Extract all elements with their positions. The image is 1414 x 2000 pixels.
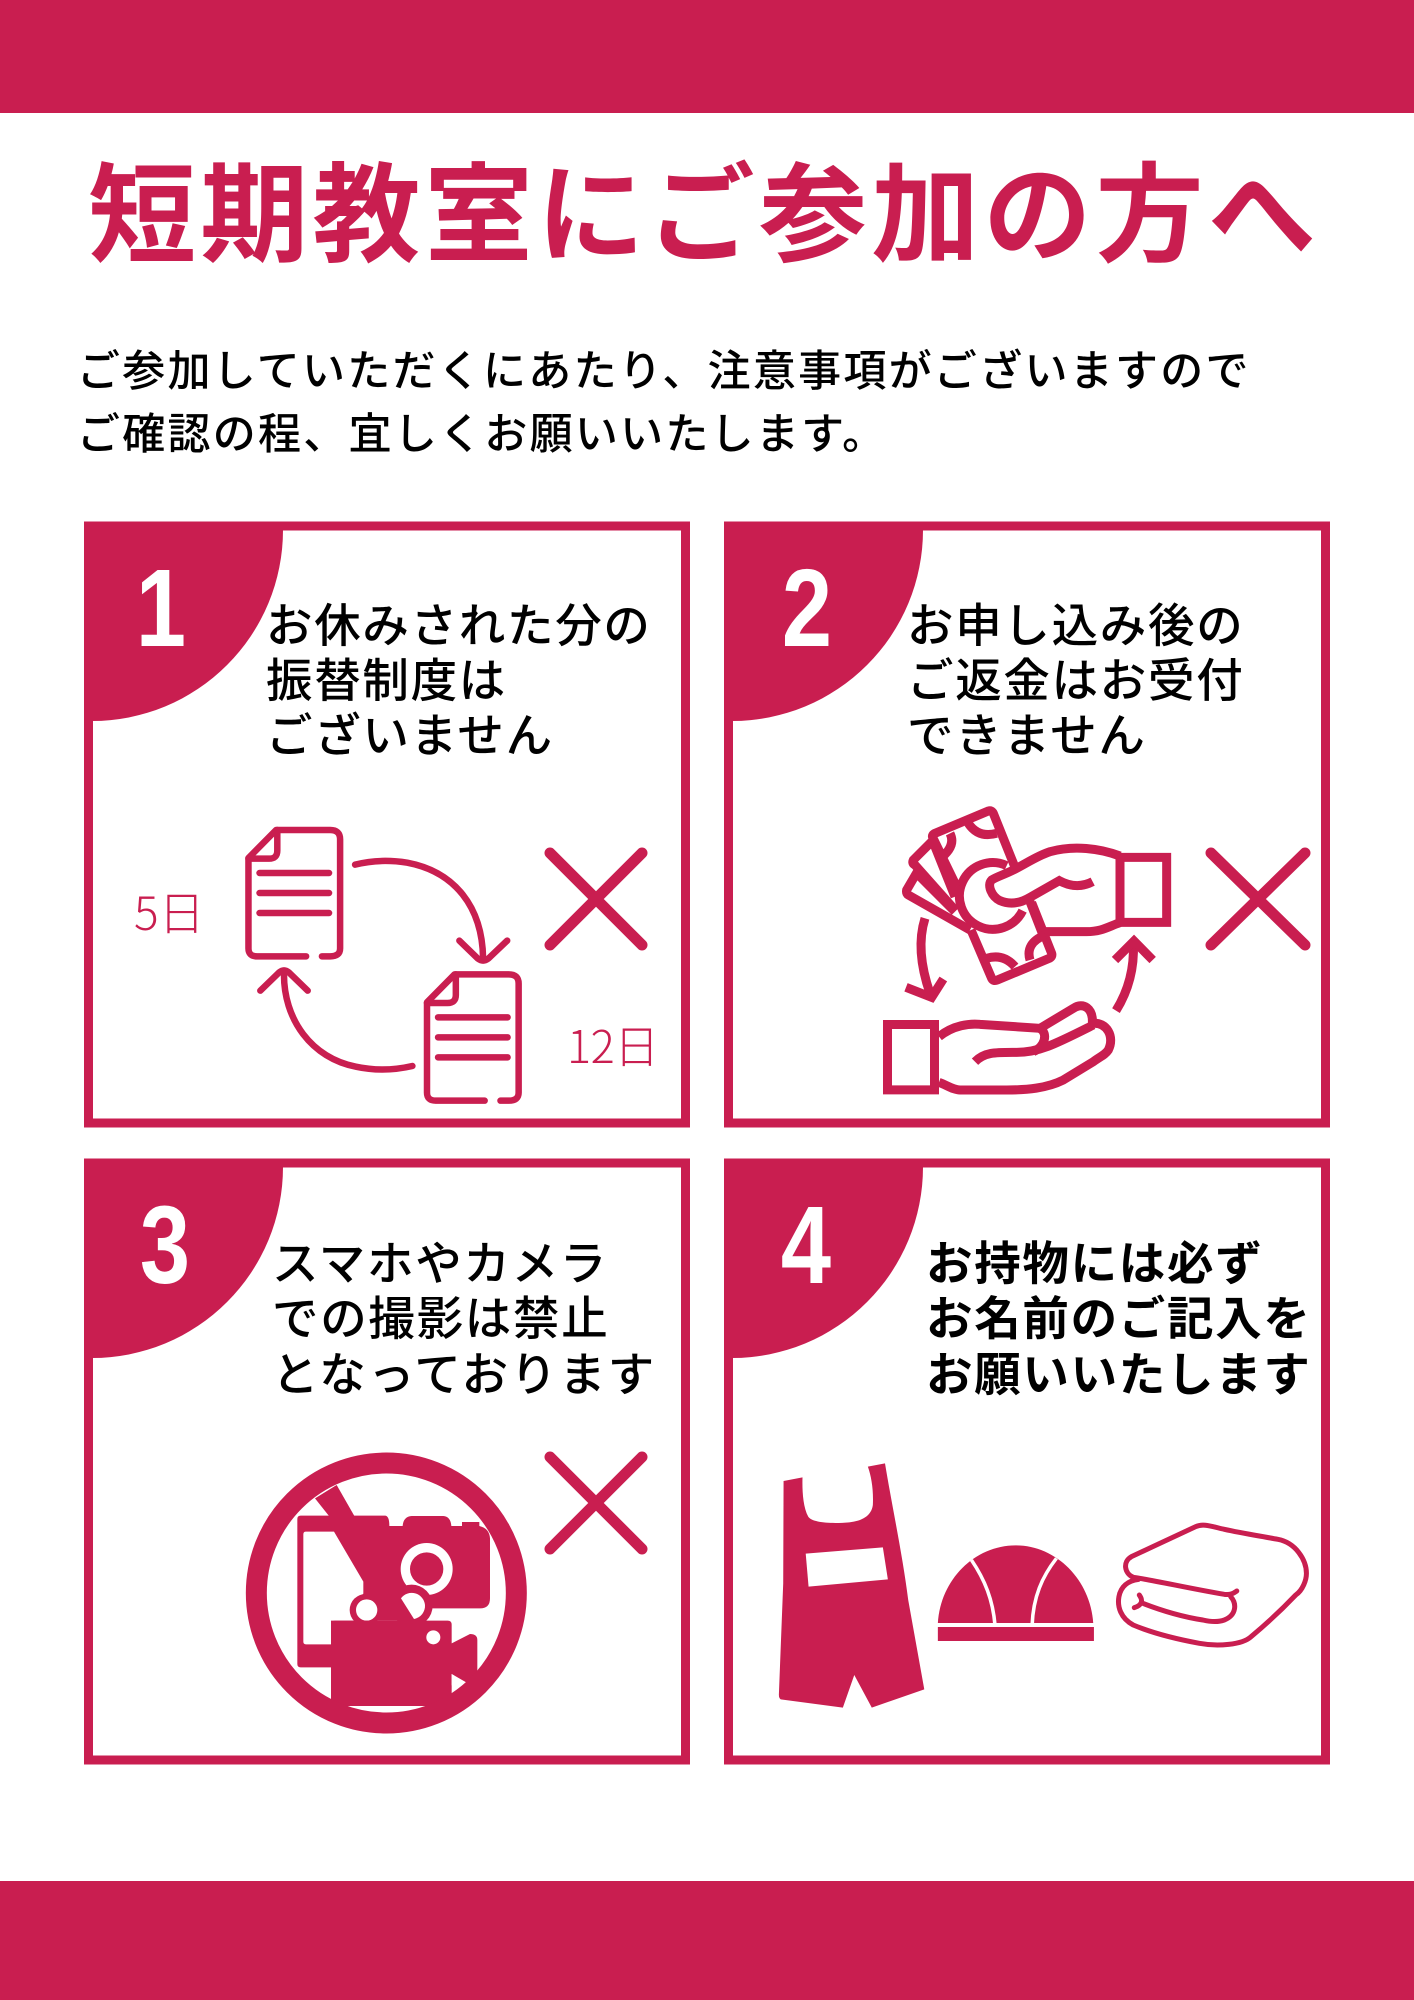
panel 4: name your belongings bbox=[724, 1159, 1326, 1760]
title: 短期教室にご参加の方へ bbox=[88, 129, 1320, 285]
intro text: ご参加していただくにあたり、注意事項がございますので bbox=[77, 337, 1251, 399]
panel 4 frame bbox=[728, 1163, 1326, 1760]
icon: cross mark bbox=[1211, 853, 1305, 945]
panel 4 text: お名前のご記入を bbox=[926, 1282, 1312, 1349]
panel 1: no make-up classes bbox=[84, 522, 686, 1123]
panel 4 number badge bbox=[724, 1159, 923, 1358]
panel 1 text: お休みされた分の bbox=[266, 589, 652, 656]
panel 1 text: ございません bbox=[266, 699, 554, 766]
panel 3 frame bbox=[88, 1163, 686, 1760]
number 3: 3 bbox=[140, 1185, 190, 1307]
label: 5 days: 5日 bbox=[134, 878, 205, 944]
icon: documents swapping with arrows bbox=[248, 830, 519, 1101]
panel 2 number badge bbox=[724, 522, 923, 721]
icon: folded towel bbox=[1118, 1525, 1306, 1645]
icon: swimsuit bbox=[779, 1463, 924, 1708]
panel 3 number badge bbox=[84, 1159, 283, 1358]
number 4: 4 bbox=[781, 1185, 831, 1307]
panel 4 text bbox=[926, 1227, 1312, 1405]
icon: cross mark bbox=[550, 1457, 642, 1549]
panel 3 text bbox=[272, 1227, 656, 1405]
panel 1 text bbox=[266, 589, 652, 766]
panel 1 frame bbox=[88, 526, 686, 1123]
panel 3 text: となっております bbox=[272, 1338, 656, 1405]
panel 3 text: での撮影は禁止 bbox=[272, 1282, 609, 1349]
number 1: 1 bbox=[136, 548, 186, 670]
top band bbox=[0, 0, 1414, 113]
panel 2 text bbox=[907, 589, 1244, 766]
panel 1 text: 振替制度は bbox=[266, 644, 507, 711]
intro text bbox=[77, 337, 1251, 462]
label: 12 days: 12日 bbox=[567, 1011, 659, 1076]
panel 2 text: ご返金はお受付 bbox=[907, 644, 1244, 711]
panel 2 frame bbox=[728, 526, 1326, 1123]
panel 2 text: お申し込み後の bbox=[907, 589, 1244, 656]
panel 4 text: お持物には必ず bbox=[926, 1227, 1263, 1294]
bottom band bbox=[0, 1881, 1414, 2000]
intro text: ご確認の程、宜しくお願いいたします。 bbox=[77, 400, 887, 462]
panel 1 number badge bbox=[84, 522, 283, 721]
panel 3 text: スマホやカメラ bbox=[272, 1227, 608, 1294]
number 2: 2 bbox=[782, 548, 832, 670]
panel 2: no refunds bbox=[724, 522, 1326, 1123]
panel 3: no photos bbox=[84, 1159, 686, 1760]
panel 2 text: できません bbox=[907, 699, 1147, 766]
icon: cross mark bbox=[550, 853, 642, 945]
icon: no cameras sign bbox=[256, 1463, 516, 1723]
icon: hands exchanging money bbox=[887, 811, 1167, 1090]
icon: swim cap bbox=[938, 1545, 1094, 1641]
panel 4 text: お願いいたします bbox=[926, 1338, 1312, 1405]
